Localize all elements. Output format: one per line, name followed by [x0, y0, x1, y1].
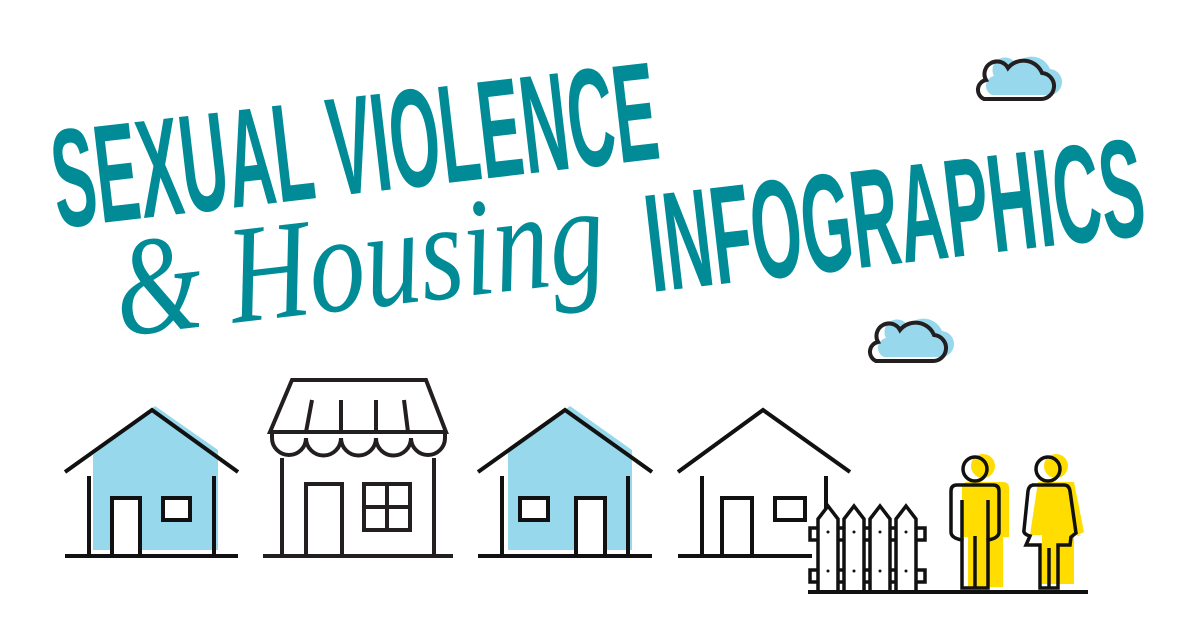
fence: [810, 506, 925, 590]
house 1 blue: [65, 406, 238, 556]
cloud top right: [978, 57, 1062, 99]
house 3 blue: [478, 406, 652, 556]
person: woman: [1024, 454, 1084, 588]
title: [43, 32, 1152, 367]
cloud middle: [870, 319, 954, 361]
person: man: [951, 454, 1009, 588]
store: [263, 380, 453, 556]
ground line: [808, 590, 1088, 594]
title line 2 script: & Housing: [106, 156, 612, 367]
house 4 outline: [678, 410, 850, 556]
